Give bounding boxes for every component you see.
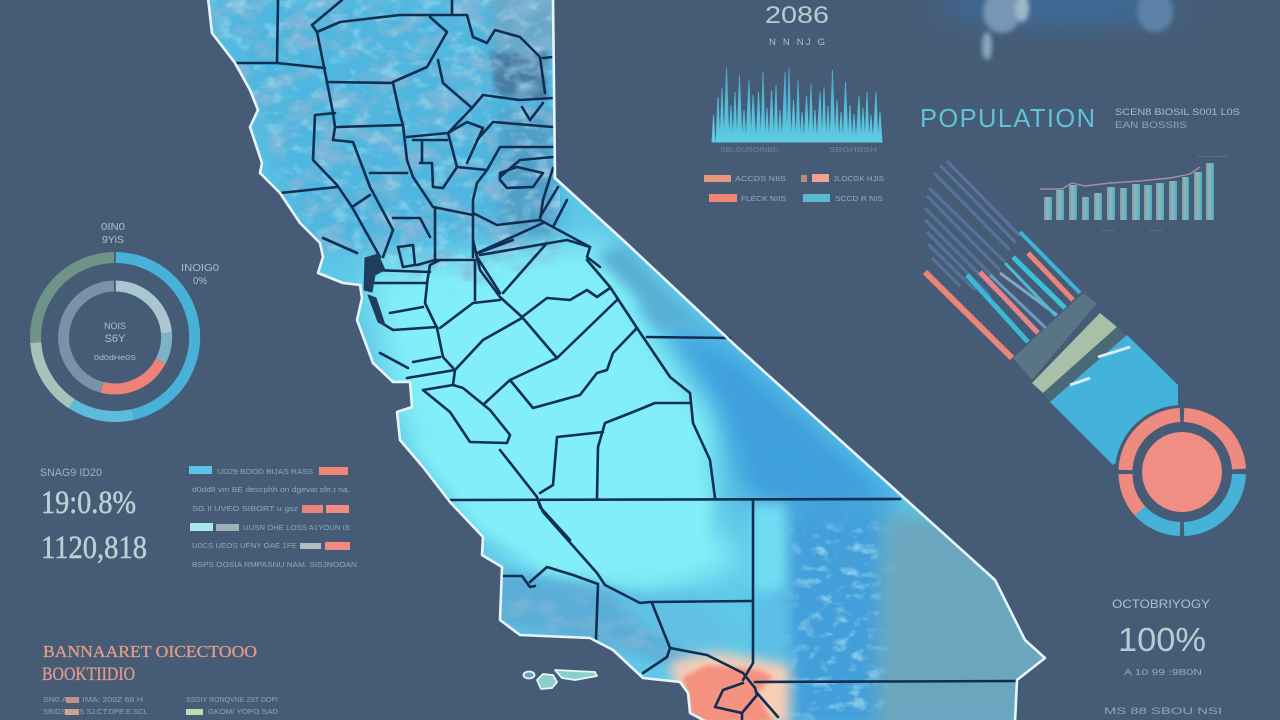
left legend rows: SG Il UVEO SIBORT u gsz bbox=[192, 504, 298, 513]
bottom left heading bbox=[42, 642, 257, 685]
population heading: POPULATION bbox=[920, 105, 1095, 133]
donut labels: 9YiS bbox=[102, 235, 124, 246]
year heading bbox=[765, 2, 829, 48]
bottom left small legend: SN0 ARR IMA: 200Z 68 H bbox=[43, 697, 143, 704]
dark shadow strip bbox=[1043, 327, 1127, 402]
left legend rows: U0CS UEOS UFNY OAE 1FE bbox=[192, 541, 297, 550]
donut labels: 0IN0 bbox=[101, 222, 125, 233]
left legend rows: UD29 BOOD BIJAS RASS bbox=[217, 467, 313, 476]
left statistics: 19:0.8% bbox=[41, 485, 136, 521]
bright bars bbox=[925, 232, 1080, 358]
bottom left small legend: SSGIY RONQVNE 2ST DOPI bbox=[186, 697, 278, 704]
chart axis labels: SBGHBSH bbox=[829, 147, 877, 154]
diagonal bar chart bbox=[925, 161, 1178, 465]
donut chart bbox=[36, 222, 219, 417]
centre legend: JLOCGK HJIS bbox=[833, 174, 884, 183]
donut labels: INOIG0 bbox=[181, 263, 219, 274]
bottom left small legend: SBIDS MSS SJ:CT:DPE:E:SCL bbox=[43, 709, 148, 716]
left legend rows: UUSN OHE LOSS A1YOUN IS bbox=[243, 523, 350, 532]
year heading: N N NJ G bbox=[769, 37, 825, 48]
left legend rows bbox=[189, 466, 357, 569]
population sub text: SCEN8 BIOSIL S001 L0S bbox=[1115, 107, 1240, 118]
chart axis labels bbox=[720, 147, 877, 154]
centre legend bbox=[704, 174, 884, 203]
state outline bbox=[208, 0, 1045, 720]
trend line bbox=[1040, 167, 1200, 189]
year heading: 2086 bbox=[765, 2, 829, 29]
donut labels: 0% bbox=[193, 276, 207, 287]
centre legend: ACCDS NIIS bbox=[735, 174, 786, 183]
population sub text: EAN BOSSIIS bbox=[1115, 120, 1187, 131]
right bottom stat: A 10 99 :9B0N bbox=[1124, 667, 1202, 677]
donut labels: NOIS bbox=[104, 321, 126, 331]
outer ring bbox=[36, 258, 195, 417]
map colour fill bbox=[190, 0, 1070, 720]
donut labels bbox=[94, 222, 219, 362]
right bottom stat: 100% bbox=[1118, 621, 1206, 658]
chart tick labels: --- ------ bbox=[1198, 154, 1228, 160]
California map bbox=[190, 0, 1070, 720]
chart tick labels: ---- bbox=[1102, 228, 1114, 234]
spike bar chart bbox=[712, 68, 882, 154]
dark background bars bbox=[925, 161, 1020, 296]
right bottom stat bbox=[1104, 597, 1222, 716]
county boundary lines bbox=[235, 0, 1017, 720]
left legend rows: BSPS OOSIA RMPASNU NAM. SISJNOOAN bbox=[192, 560, 357, 569]
bottom left small legend bbox=[43, 697, 278, 716]
donut labels: 0d0dHe0S bbox=[94, 353, 136, 362]
chart tick labels bbox=[1102, 154, 1228, 234]
left statistics: SNAG9 ID20 bbox=[40, 467, 102, 479]
decorative blue blotches top right bbox=[940, 0, 1180, 60]
chart axis labels: SBLGUSOINBE bbox=[720, 147, 778, 154]
right bottom stat: OCTOBRIYOGY bbox=[1112, 597, 1210, 611]
left statistics: 1120,818 bbox=[41, 530, 147, 566]
Channel islands bbox=[524, 670, 597, 689]
centre legend: FLECK NIIS bbox=[741, 194, 786, 203]
centre legend: SCCD R NIS bbox=[835, 194, 883, 203]
left legend rows: d0dd8 vm BE descphh on dgevat sfe.t na. bbox=[192, 485, 350, 494]
bottom left heading: BANNAARET OICECTOOO bbox=[43, 642, 257, 661]
left statistics bbox=[40, 467, 147, 566]
population sub text bbox=[1115, 107, 1240, 131]
bottom left small legend: GKOM/ YOPO SAD bbox=[208, 709, 278, 716]
banner highlights bbox=[1070, 347, 1130, 385]
chart tick labels: ---- bbox=[1150, 228, 1162, 234]
dark wave band bbox=[1013, 293, 1097, 380]
inner ring bbox=[64, 286, 167, 389]
right bottom stat: MS 88 SBOU NSI bbox=[1104, 706, 1222, 716]
donut labels: S6Y bbox=[105, 333, 126, 345]
bay water bbox=[364, 254, 385, 325]
small bar chart bbox=[1040, 154, 1228, 234]
bottom left heading: BOOKTIIDIO bbox=[42, 664, 135, 685]
olive image strip bbox=[1032, 313, 1117, 393]
coral ring chart bbox=[1115, 405, 1249, 539]
blue banner bbox=[1050, 335, 1178, 465]
